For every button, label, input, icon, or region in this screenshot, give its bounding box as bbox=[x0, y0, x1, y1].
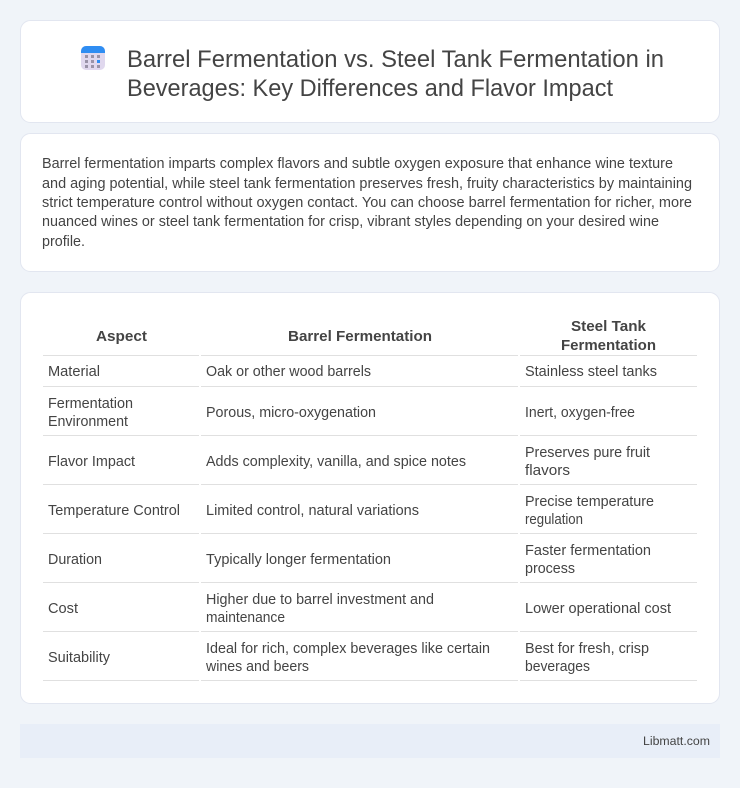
intro text: and aging potential, while steel tank fermentation preserves fresh, fruity characteristics by maintaining bbox=[42, 176, 692, 192]
row: material: Material bbox=[48, 364, 100, 380]
row: suitability: Best for fresh, crisp bbox=[525, 641, 649, 657]
icon: calendar bbox=[81, 46, 105, 70]
table header: Fermentation bbox=[561, 337, 656, 354]
row: flavor impact bbox=[48, 445, 650, 479]
title: Barrel Fermentation vs. Steel Tank Fermentation in bbox=[127, 46, 664, 73]
row: temperature control: Precise temperature bbox=[525, 494, 654, 510]
table header: Steel Tank bbox=[571, 318, 647, 335]
row: suitability: Ideal for rich, complex beverages like certain bbox=[206, 641, 490, 657]
row: duration: Duration bbox=[48, 552, 102, 568]
row: temperature control bbox=[48, 494, 654, 528]
footer: Libmatt.com bbox=[643, 734, 710, 748]
row: cost: Cost bbox=[48, 601, 78, 617]
row: flavor impact: Flavor Impact bbox=[48, 454, 135, 470]
intro text bbox=[42, 156, 692, 250]
row: fermentation environment: Porous, micro-oxygenation bbox=[206, 405, 376, 421]
row: fermentation environment: Fermentation bbox=[48, 396, 133, 412]
row: temperature control: Limited control, natural variations bbox=[206, 503, 419, 519]
row: flavor impact: flavors bbox=[525, 463, 570, 479]
panel: introduction bbox=[20, 134, 720, 272]
table header bbox=[96, 318, 656, 354]
row: cost: maintenance bbox=[206, 610, 285, 626]
row: temperature control: Temperature Control bbox=[48, 503, 180, 519]
row: cost: Lower operational cost bbox=[525, 601, 671, 617]
row: flavor impact: Preserves pure fruit bbox=[525, 445, 650, 461]
row: suitability: Suitability bbox=[48, 650, 111, 666]
row: fermentation environment: Environment bbox=[48, 414, 128, 430]
row: suitability: beverages bbox=[525, 659, 590, 675]
row: cost bbox=[48, 592, 671, 626]
row: duration: Typically longer fermentation bbox=[206, 552, 391, 568]
row: fermentation environment bbox=[48, 396, 635, 430]
row: flavor impact: Adds complexity, vanilla, and spice notes bbox=[206, 454, 466, 470]
table header: Barrel Fermentation bbox=[288, 328, 432, 345]
row: suitability: wines and beers bbox=[205, 659, 309, 675]
row: duration: Faster fermentation bbox=[525, 543, 651, 559]
row: temperature control: regulation bbox=[525, 512, 583, 528]
title bbox=[127, 46, 664, 102]
panel: comparison table bbox=[20, 292, 720, 704]
intro text: strict temperature control without oxygen contact. You can choose barrel fermentation for richer, more bbox=[42, 195, 692, 211]
row: suitability bbox=[48, 641, 649, 675]
intro text: profile. bbox=[42, 234, 85, 250]
intro text: nuanced wines or steel tank fermentation for crisp, vibrant styles depending on your desired wine bbox=[42, 214, 659, 230]
row: material: Stainless steel tanks bbox=[525, 364, 657, 380]
row: cost: Higher due to barrel investment and bbox=[206, 592, 434, 608]
footer bbox=[20, 724, 720, 758]
panel: header bbox=[20, 20, 720, 122]
row: material: Oak or other wood barrels bbox=[206, 364, 371, 380]
title: Beverages: Key Differences and Flavor Impact bbox=[127, 75, 613, 102]
row: duration bbox=[48, 543, 651, 577]
row: duration: process bbox=[525, 561, 575, 577]
table header: Aspect bbox=[96, 328, 147, 345]
row: fermentation environment: Inert, oxygen-free bbox=[525, 405, 635, 421]
row: material bbox=[48, 364, 657, 380]
intro text: Barrel fermentation imparts complex flavors and subtle oxygen exposure that enhance wine texture bbox=[42, 156, 673, 172]
